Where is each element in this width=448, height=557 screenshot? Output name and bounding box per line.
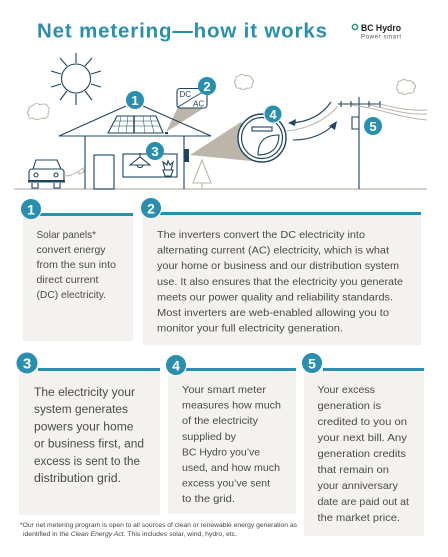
footnote: *Our net metering program is open to all sources of clean or renewable energy generation as [20, 522, 297, 529]
badge: 1 illustration: 1 [131, 93, 139, 108]
badge: 3 illustration [146, 142, 164, 160]
badge: 2 illustration: 2 [203, 79, 211, 94]
icon: DC/AC converter [177, 88, 207, 108]
step 1 text: convert energy [36, 245, 106, 256]
illustration: net metering system [14, 53, 427, 189]
step 4 text: BC Hydro you’ve [182, 447, 260, 458]
step 5 text: that remain on [318, 465, 389, 476]
title: Net metering—how it works [37, 20, 327, 43]
panel: step 3 [16, 352, 160, 515]
badge: 5 illustration: 5 [369, 119, 377, 134]
step 4 badge: 4 [172, 358, 180, 374]
step 2 text: use. It also ensures that the electricity you generate [157, 277, 403, 288]
badge: 3 illustration: 3 [151, 144, 159, 159]
icon: solar panels [108, 116, 163, 133]
arrow: power to grid [293, 121, 337, 140]
icon: car [28, 160, 65, 188]
ground line [14, 188, 427, 190]
step 3 text: The electricity your [34, 387, 135, 399]
logo: BC Hydro Power smart [352, 23, 401, 40]
panel: step 5 [302, 352, 424, 536]
panel: step 2 [140, 198, 421, 345]
icon: cloud right [396, 80, 416, 94]
step 2 text: monitor your full electricity generation. [157, 324, 343, 335]
step 1 text: (DC) electricity. [36, 290, 106, 301]
step 4 badge [166, 354, 186, 376]
step 5 text [318, 385, 409, 524]
footnote [20, 522, 297, 538]
wire: service line [286, 106, 338, 131]
step 5 text: credited to you on [318, 417, 407, 428]
step 5 text: your anniversary [318, 481, 399, 492]
icon: inverter [184, 149, 189, 162]
step 5 badge: 5 [308, 356, 316, 372]
icon: DC/AC converter: DC [180, 90, 191, 99]
step 5 text: generation is [318, 401, 381, 412]
step 4 text: of the electricity [182, 416, 259, 427]
step 1 text: direct current [36, 275, 99, 286]
step 4 text: to the grid. [182, 494, 235, 505]
step 5 text: your next bill. Any [318, 433, 408, 444]
step 3 text: excess is sent to the [34, 456, 140, 468]
step 4 text: Your smart meter [182, 385, 267, 396]
step 2 badge: 2 [147, 200, 155, 216]
step 2 text [157, 230, 403, 335]
badge: 2 illustration [198, 77, 216, 95]
step 3 text: or business first, and [34, 439, 144, 451]
icon: plant [163, 161, 173, 176]
panel: step 1 [20, 198, 133, 341]
step 2 badge [140, 198, 162, 218]
logo: BC Hydro Power smart: Power smart [361, 34, 401, 40]
step 4 text: measures how much [182, 401, 281, 412]
wires to the right [351, 104, 427, 120]
step 4 text: excess you’ve sent [182, 479, 270, 490]
arrow: power from grid [288, 102, 331, 126]
step 2 text: Most inverters are web-enabled allowing you to [157, 308, 389, 319]
step 3 badge [16, 352, 38, 374]
beam: meter callout [190, 122, 262, 162]
badge: 5 illustration [364, 117, 382, 135]
step 4 text [182, 385, 281, 505]
beam: inverter callout [166, 107, 204, 132]
step 3 text [34, 387, 144, 485]
step 5 text: date are paid out at [318, 497, 409, 508]
icon: tree [193, 160, 211, 189]
icon: smart meter [238, 114, 286, 162]
icon: inverter small mark on roof [165, 132, 168, 134]
icon: car charging cable [64, 168, 84, 176]
step 2 text: The inverters convert the DC electricity into [157, 230, 365, 241]
step 1 text [36, 230, 116, 301]
step 1 badge [20, 198, 42, 220]
badge: 4 illustration [264, 105, 282, 123]
step 1 badge: 1 [27, 202, 35, 218]
step 5 badge [302, 352, 322, 374]
footnote: identified in the Clean Energy Act . This includes solar, wind, hydro, etc. [23, 531, 237, 538]
panel: step 4 [166, 354, 296, 514]
step 2 text: your home or business and our distribution system [157, 261, 399, 272]
step 5 text: generation credits [318, 449, 406, 460]
step 1 text: from the sun into [36, 260, 116, 271]
badge: 1 illustration [126, 91, 144, 109]
icon: house [59, 106, 211, 189]
step 2 text: meets our power quality and reliability standards. [157, 292, 393, 303]
step 3 badge: 3 [23, 356, 31, 372]
step 1 text: Solar panels* [36, 230, 96, 241]
badge: 4 illustration: 4 [269, 107, 277, 122]
step 4 text: used, and how much [182, 463, 280, 474]
step 5 text: the market price. [318, 513, 400, 524]
step 3 text: powers your home [34, 421, 134, 433]
step 4 text: supplied by [182, 432, 237, 443]
icon: DC/AC converter: AC [193, 100, 204, 108]
icon: sun [51, 53, 101, 105]
icon: utility pole [338, 97, 381, 189]
step 5 text: Your excess [318, 385, 375, 396]
step 3 text: distribution grid. [34, 473, 121, 485]
step 2 text: alternating current (AC) electricity, which is what [157, 246, 389, 257]
icon: lamp [130, 153, 150, 168]
logo: BC Hydro Power smart: BC Hydro [361, 23, 401, 33]
step 3 text: system generates [34, 404, 128, 416]
icon: cloud middle [234, 74, 254, 90]
icon: cloud left [28, 104, 49, 120]
